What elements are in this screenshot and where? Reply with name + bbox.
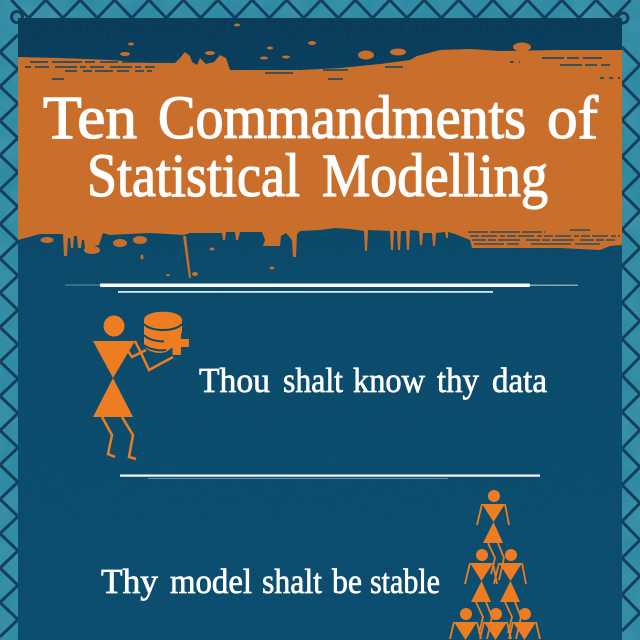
divider two: [120, 474, 540, 479]
commandment two text: stable: [370, 562, 440, 601]
icon: human pyramid: [450, 490, 540, 640]
title: Statistical: [87, 143, 300, 210]
banner dry-brush streaks: [25, 58, 620, 244]
title: of: [547, 85, 599, 152]
icon: woman holding database: [93, 312, 189, 459]
commandment two text: shalt: [262, 562, 322, 601]
title: Ten: [43, 85, 137, 152]
commandment two text: model: [170, 562, 252, 601]
title: Modelling: [322, 143, 548, 210]
commandment one text: Thou: [199, 361, 270, 400]
title: [43, 85, 599, 210]
commandment one text: know: [353, 361, 426, 400]
commandment one text: data: [492, 361, 547, 400]
orange brush banner: [18, 24, 622, 278]
commandment one text: shalt: [283, 361, 343, 400]
divider one: [65, 284, 578, 293]
commandment one text: thy: [437, 361, 479, 400]
title: Commandments: [158, 85, 526, 152]
commandment two text: be: [332, 562, 362, 601]
commandment two text: Thy: [101, 562, 158, 601]
